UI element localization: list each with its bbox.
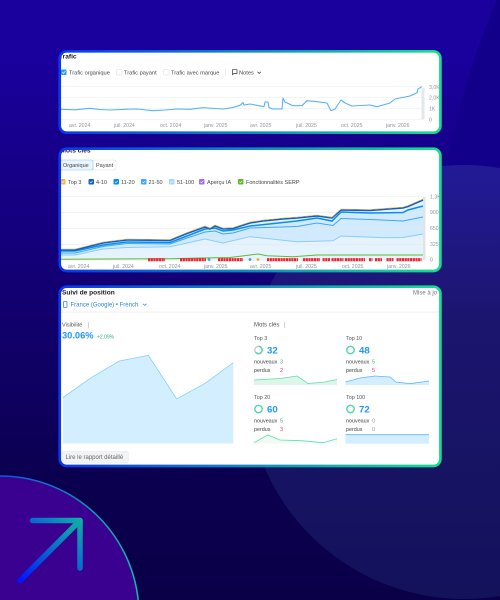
chart: trafic organique: 3,0K: [429, 85, 440, 91]
card: top 10: nouveaux: [346, 360, 370, 366]
visibility block: [62, 322, 233, 463]
visibility block: Visibilité: [62, 322, 82, 328]
tabs: organique payant: Payant: [96, 163, 114, 169]
card: top 100: 0: [372, 418, 375, 424]
keywords block: [254, 322, 429, 444]
legend: positions: 51-100: [177, 180, 194, 186]
chart: mots cles: 325: [430, 242, 439, 248]
card: top 10: 5: [372, 368, 375, 374]
card: top 3: 2: [280, 368, 283, 374]
area chart: visibility: [63, 355, 233, 444]
panel: suivi de position: [60, 287, 440, 466]
card: top 100: [346, 395, 429, 444]
card: top 20: Top 20: [254, 395, 270, 401]
card: top 10: [346, 336, 429, 385]
card: top 3: 3: [280, 360, 283, 366]
card: top 3: perdus: [254, 368, 271, 374]
chart: trafic organique: 1K: [429, 106, 436, 112]
legend: positions: Fonctionnalités SERP: [246, 180, 300, 186]
heading: mots cles: Mots clés: [60, 148, 91, 155]
card: top 3: Top 3: [254, 336, 267, 342]
chart: mots cles: oct. 2025: [342, 264, 363, 270]
card: top 100: Top 100: [346, 395, 365, 401]
chart: mots cles: 1,3K: [430, 194, 441, 200]
chart: trafic organique: [61, 85, 440, 129]
chart: mots cles: [61, 194, 441, 270]
chart: mots cles: juil. 2025: [295, 264, 317, 270]
card: top 20: nouveaux: [254, 418, 278, 424]
panel: mots cles: [60, 148, 441, 271]
chart: trafic organique: 0: [429, 117, 432, 123]
card: top 100: 72: [359, 404, 370, 416]
chart: mots cles: 0: [430, 258, 433, 264]
chart: mots cles: avr. 2025: [250, 264, 271, 270]
chart: mots cles: avr. 2024: [68, 264, 89, 270]
chart: trafic organique: avr. 2025: [250, 123, 271, 129]
chart: mots cles: 650: [430, 226, 439, 232]
legend: trafic: Trafic avec marque: [171, 70, 219, 76]
location selector: France (Google) • French: [70, 302, 138, 308]
card: top 20: 5: [280, 418, 283, 424]
legend: positions: Top 3: [68, 180, 81, 186]
chart: trafic organique: 2,0K: [429, 96, 440, 102]
tabs: organique payant: [60, 160, 116, 170]
corner circle: [0, 476, 138, 600]
card: top 10: 48: [359, 346, 370, 356]
legend: positions: 4-10: [96, 180, 107, 186]
card: top 20: [254, 395, 337, 444]
card: top 20: 3: [280, 427, 283, 433]
card: top 10: 5: [372, 360, 375, 366]
chart: mots cles: janv. 2025: [203, 264, 228, 270]
card: top 10: perdus: [346, 368, 363, 374]
button: Lire le rapport détaillé: [66, 455, 124, 461]
button: [62, 452, 128, 463]
update label: Mise à jo: [413, 290, 438, 296]
card: top 10: Top 10: [346, 336, 362, 342]
chart: trafic organique: oct. 2025: [341, 123, 362, 129]
card: top 100: 0: [372, 427, 375, 433]
chart: trafic organique: juil. 2025: [295, 123, 317, 129]
card: top 100: perdus: [346, 427, 363, 433]
chart: mots cles: juil. 2024: [112, 264, 134, 270]
keywords block: [: [284, 322, 286, 328]
legend: positions: [60, 179, 300, 186]
chart: trafic organique: janv. 2025: [203, 123, 228, 129]
card: top 20: 60: [267, 404, 278, 416]
legend: trafic: Notes: [239, 70, 254, 76]
legend: positions: 21-50: [148, 180, 163, 186]
chart: mots cles: janv. 2026: [386, 264, 411, 270]
chart: trafic organique: janv. 2026: [385, 123, 410, 129]
panel: trafic: [59, 51, 440, 133]
legend: trafic: Trafic payant: [124, 70, 157, 76]
icon: arrow: [20, 520, 80, 580]
chart: trafic organique: oct. 2024: [160, 123, 181, 129]
chart: trafic organique: juil. 2024: [113, 123, 135, 129]
card: top 3: [254, 336, 337, 385]
chart: trafic organique: avr. 2024: [69, 123, 90, 129]
visibility block: [: [88, 322, 90, 328]
keywords block: Mots clés: [254, 322, 279, 328]
legend: positions: Aperçu IA: [207, 180, 231, 186]
visibility change: +2.09%: [97, 334, 115, 340]
card: top 3: nouveaux: [254, 360, 278, 366]
legend: trafic: Trafic organique: [69, 70, 110, 76]
card: top 3: 32: [267, 346, 278, 356]
visibility value: 30.06%: [62, 330, 94, 340]
card: top 100: nouveaux: [346, 418, 370, 424]
chart: mots cles: 900: [430, 210, 439, 216]
heading: trafic: Trafic: [59, 54, 77, 60]
legend: trafic: [61, 68, 261, 76]
card: top 20: perdus: [254, 427, 271, 433]
chart: mots cles: oct. 2024: [159, 264, 180, 270]
heading: suivi de position: Suivi de position: [62, 290, 115, 296]
tabs: organique payant: Organique: [63, 163, 89, 169]
legend: positions: 11-20: [121, 180, 135, 186]
